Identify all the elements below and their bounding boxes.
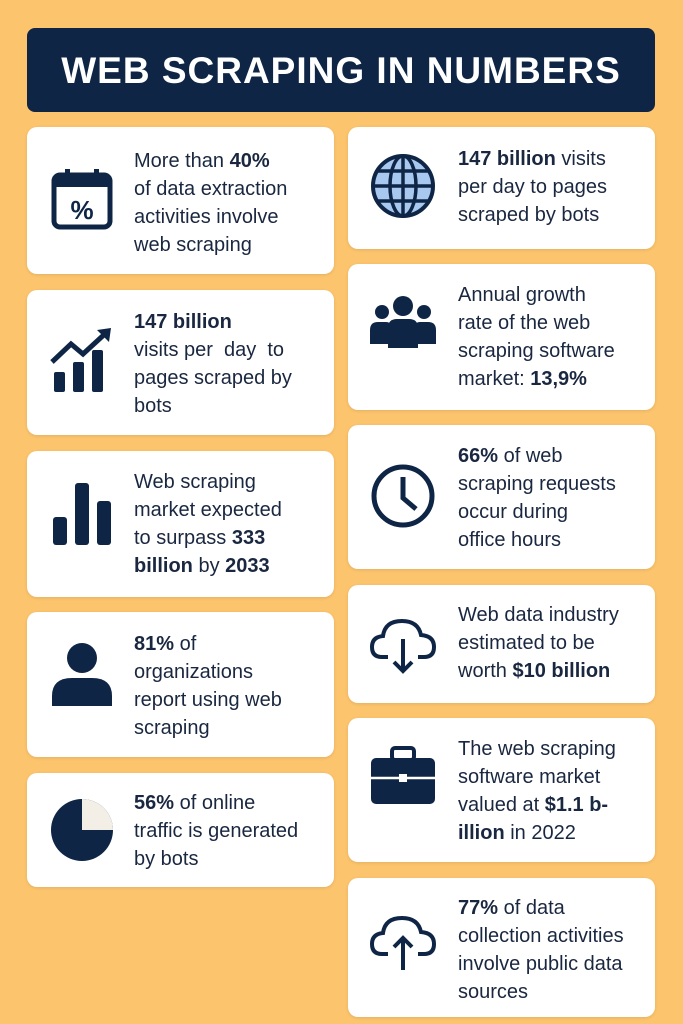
text: scraping requests xyxy=(458,473,616,495)
text: software market xyxy=(458,766,600,788)
text xyxy=(458,284,615,390)
text: per day to pages xyxy=(458,176,607,198)
card: 56% traffic xyxy=(27,773,334,887)
text xyxy=(458,148,607,226)
text: organizations xyxy=(134,661,253,683)
text: 77% of data xyxy=(458,897,565,919)
text xyxy=(458,445,616,551)
text xyxy=(458,897,624,1003)
text: 147 billion visits xyxy=(458,148,606,170)
card: 147 billion (right) xyxy=(348,127,655,249)
text: office hours xyxy=(458,529,561,551)
text: Web scraping xyxy=(134,471,256,493)
text: collection activities xyxy=(458,925,624,947)
icon: calendar percent: % xyxy=(70,195,94,225)
text: scraping xyxy=(134,717,210,739)
text: of data extraction xyxy=(134,178,287,200)
text: report using web xyxy=(134,689,282,711)
text: scraped by bots xyxy=(458,204,599,226)
icon: pie xyxy=(51,799,113,861)
text: market: 13,9% xyxy=(458,368,587,390)
text xyxy=(134,471,282,577)
title: WEB SCRAPING IN NUMBERS xyxy=(61,50,621,91)
text: More than 40% xyxy=(134,150,270,172)
text: occur during xyxy=(458,501,568,523)
text: web scraping xyxy=(134,234,252,256)
icon: cloud upload xyxy=(370,916,436,970)
text: involve public data xyxy=(458,953,623,975)
icon: bar chart xyxy=(53,483,111,545)
text: activities involve xyxy=(134,206,279,228)
text: traffic is generated xyxy=(134,820,298,842)
text: to surpass 333 xyxy=(134,527,265,549)
text xyxy=(134,792,298,870)
card: 147 billion visits (left) xyxy=(27,290,334,435)
card: 81% organizations xyxy=(27,612,334,757)
text: market expected xyxy=(134,499,282,521)
text: pages scraped by xyxy=(134,367,292,389)
card: 66% office hours xyxy=(348,425,655,569)
icon: cloud download xyxy=(370,619,436,674)
icon: briefcase xyxy=(371,746,435,804)
icon: calendar percent xyxy=(52,169,112,230)
card: $1.1 billion xyxy=(348,718,655,862)
icon: growth chart xyxy=(50,328,111,392)
text: illion in 2022 xyxy=(458,822,576,844)
icon: group xyxy=(370,296,436,348)
text xyxy=(458,604,619,682)
text: scraping software xyxy=(458,340,615,362)
card: market 333 billion xyxy=(27,451,334,597)
text: worth $10 billion xyxy=(458,660,610,682)
card: 77% public data xyxy=(348,878,655,1017)
icon: person xyxy=(52,643,112,706)
text xyxy=(458,738,616,844)
text: 66% of web xyxy=(458,445,563,467)
title xyxy=(27,28,655,112)
text xyxy=(134,150,287,256)
icon: clock xyxy=(372,464,434,528)
icon: globe xyxy=(371,154,435,218)
card: annual growth xyxy=(348,264,655,410)
text xyxy=(134,633,282,739)
text: by bots xyxy=(134,848,198,870)
card: 40% data extraction xyxy=(27,127,334,274)
text xyxy=(134,311,292,417)
text: bots xyxy=(134,395,172,417)
text: billion by 2033 xyxy=(134,555,270,577)
text: 81% of xyxy=(134,633,196,655)
text: visits per day to xyxy=(134,339,284,361)
text: rate of the web xyxy=(458,312,590,334)
text: valued at $1.1 b- xyxy=(458,794,608,816)
text: The web scraping xyxy=(458,738,616,760)
card: $10 billion xyxy=(348,585,655,703)
text: Annual growth xyxy=(458,284,586,306)
text: sources xyxy=(458,981,528,1003)
text: 56% of online xyxy=(134,792,255,814)
text: estimated to be xyxy=(458,632,595,654)
text: 147 billion xyxy=(134,311,232,333)
text: Web data industry xyxy=(458,604,619,626)
